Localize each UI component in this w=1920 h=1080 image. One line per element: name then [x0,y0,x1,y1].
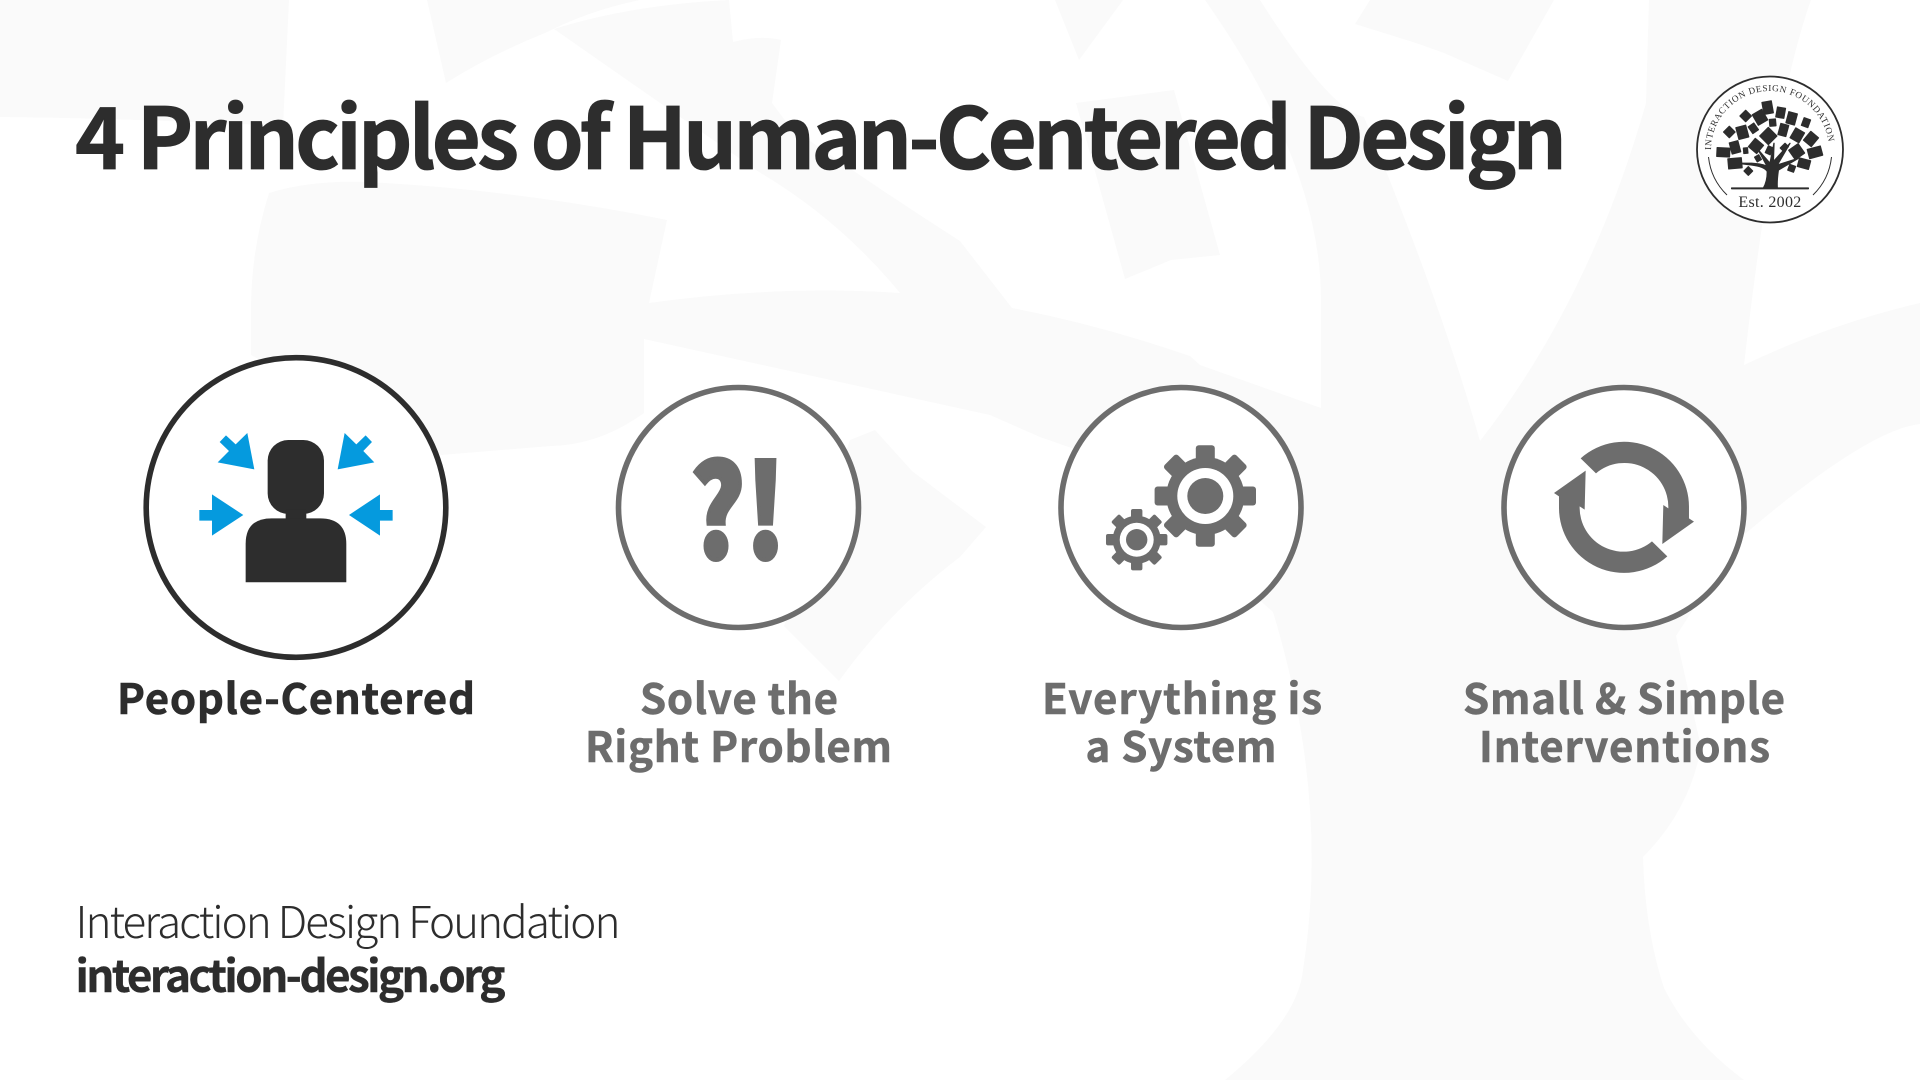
icon: question and exclamation marks: ?! [690,410,786,595]
icon: gears [1106,445,1256,570]
circle outline [618,388,858,628]
label: Solve the Right Problem [585,666,892,775]
label: Solve the Right Problem: Right Problem [585,714,892,775]
title: 4 Principles of Human-Centered Design [75,71,1567,194]
circle outline [1504,388,1744,628]
principle 3: Everything is a System [1042,388,1322,775]
icon: cycle arrows [1554,442,1694,573]
label: Small & Simple Interventions: Small & Simple [1463,666,1785,727]
principle 1: People-Centered [117,358,475,727]
principle 2: Solve the Right Problem [585,388,892,775]
label: Everything is a System [1042,666,1322,775]
circle outline [146,358,446,657]
icon: person with inward arrows [199,433,393,582]
label: Everything is a System: Everything is [1042,666,1322,727]
logo: Interaction Design Foundation seal: Est. 2002 [1738,194,1802,211]
logo: Interaction Design Foundation seal: INTERACTION DESIGN FOUNDATION [1705,85,1834,150]
footer: organisation name and website: Interaction Design Foundation [76,887,620,951]
label: Solve the Right Problem: Solve the [640,666,838,727]
label: Small & Simple Interventions [1463,666,1785,775]
logo: Interaction Design Foundation seal [1696,76,1844,224]
circle outline [1061,388,1301,628]
label: People-Centered: People-Centered [117,666,475,727]
footer: organisation name and website [76,887,620,1005]
label: Everything is a System: a System [1086,714,1276,775]
footer: organisation name and website: interaction-design.org [76,941,506,1005]
principle 4: Small & Simple Interventions [1463,388,1785,775]
label: Small & Simple Interventions: Interventions [1479,714,1770,775]
